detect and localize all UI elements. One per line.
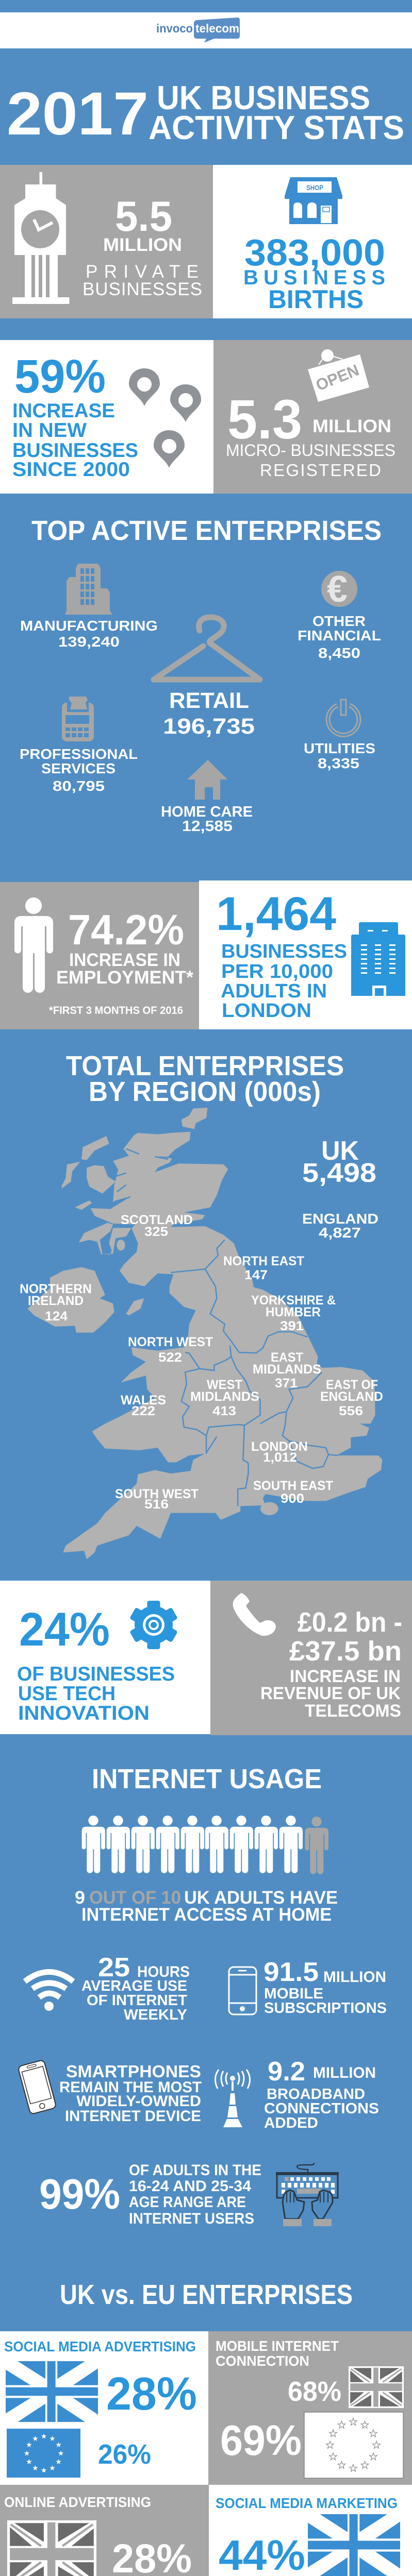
text: smartphones: SMARTPHONES: [66, 2062, 201, 2081]
heading: mobile internet connection: [216, 2338, 339, 2369]
icon: keyboard and hands: [276, 2163, 339, 2226]
label: yorkshire and humber: 391: [280, 1319, 304, 1333]
panel: tech innovation: [0, 1581, 210, 1734]
icon: shop: SHOP: [306, 183, 323, 192]
icon: power button: [328, 700, 359, 735]
stat: 59%: 59%: [14, 350, 106, 403]
label: other financial: [298, 613, 381, 661]
label: northern ireland: NORTHERN: [20, 1282, 92, 1296]
label: utilities: [304, 740, 375, 771]
text: businesses per 10,000 adults in london: [221, 941, 347, 1022]
text: micro-businesses registered: REGISTERED: [260, 461, 381, 480]
footnote: *FIRST 3 MONTHS OF 2016: [49, 1005, 183, 1016]
label: other financial: FINANCIAL: [298, 628, 381, 643]
text: businesses per 10,000 adults in london: PER 10,000: [221, 961, 333, 982]
label: east midlands: EAST: [271, 1350, 303, 1365]
icon: coat hanger: [154, 617, 260, 680]
stat: revenue range: [289, 1607, 402, 1667]
label: west midlands: WEST: [207, 1378, 242, 1392]
stat: 1,464: 1,464: [216, 888, 336, 940]
text: of businesses use tech innovation: [17, 1663, 175, 1724]
stat: 383,000 business births: BUSINESS: [243, 266, 385, 289]
text: smartphones: [59, 2062, 202, 2125]
label: yorkshire and humber: [251, 1293, 336, 1333]
panel: business births: [213, 165, 412, 318]
text: increase in revenue of uk telecoms: INCREASE IN: [290, 1667, 401, 1686]
text: businesses per 10,000 adults in london: LONDON: [222, 1000, 311, 1022]
label: north west: [128, 1335, 213, 1365]
text: increase in revenue of uk telecoms: REVENUE OF UK: [260, 1684, 401, 1703]
label: other financial: 8,450: [318, 645, 360, 661]
stat: uk 28%: 28%: [106, 2368, 197, 2420]
label: northern ireland: 124: [45, 1309, 68, 1324]
stat: 5.5 million private businesses: [83, 192, 202, 299]
stat: 25 hours: WEEKLY: [124, 2007, 187, 2023]
heading: online advertising: ONLINE ADVERTISING: [4, 2494, 151, 2510]
stat: 91.5 million mobile subscriptions: MILLION: [323, 1969, 386, 1986]
panel: social media advertising: [0, 2331, 208, 2485]
label: wales: WALES: [121, 1393, 166, 1408]
stat: 91.5 million mobile subscriptions: [263, 1957, 387, 2016]
label: east of england: 556: [339, 1404, 363, 1418]
label: east of england: ENGLAND: [320, 1389, 383, 1404]
text: increase in revenue of uk telecoms: TELECOMS: [305, 1701, 401, 1721]
stat: 383,000 business births: [243, 232, 385, 314]
panel: employment: [0, 882, 199, 1029]
text: of businesses use tech innovation: OF BUSINESSES: [17, 1663, 175, 1685]
text: adults age range: [129, 2162, 261, 2227]
label: scotland: 325: [144, 1225, 168, 1239]
stat: 5.5 million private businesses: 5.5: [115, 192, 172, 240]
heading: mobile internet connection: MOBILE INTERNET: [216, 2338, 339, 2354]
text: adults age range: AGE RANGE ARE: [129, 2194, 246, 2211]
heading: social media marketing: SOCIAL MEDIA MARKETING: [216, 2495, 398, 2511]
icon: mobile phone outline: [229, 1967, 256, 2014]
text: 9 out of 10 uk adults: 9: [75, 1888, 85, 1908]
stat: eu 69%: 69%: [220, 2416, 302, 2464]
icon: house: [187, 760, 227, 800]
text: 9 out of 10 uk adults: OUT OF 10: [89, 1888, 181, 1908]
label: east of england: EAST OF: [326, 1378, 378, 1392]
item: other financial: [298, 569, 381, 661]
stat: 9.2 million broadband: BROADBAND: [267, 2086, 365, 2103]
text: increase in new businesses: INCREASE: [12, 400, 115, 422]
text: increase in employment: [56, 950, 193, 988]
stat: 9.2 million broadband: ADDED: [264, 2115, 318, 2131]
label: home care: HOME CARE: [161, 804, 253, 820]
text: adults age range: OF ADULTS IN THE: [129, 2162, 261, 2179]
icon: uk flag: [7, 2520, 96, 2576]
text: businesses per 10,000 adults in london: ADULTS IN: [221, 980, 327, 1002]
text: smartphones: REMAIN THE MOST: [59, 2079, 202, 2096]
stat: 99%: 99%: [39, 2170, 120, 2218]
stat: 5.3 million: [227, 388, 391, 450]
heading: internet usage: INTERNET USAGE: [92, 1764, 322, 1794]
label: retail: [163, 688, 255, 739]
stat: 5.5 million private businesses: MILLION: [103, 235, 182, 255]
label: west midlands: MIDLANDS: [190, 1389, 259, 1404]
text: increase in employment: INCREASE IN: [69, 950, 180, 970]
stat: 9.2 million broadband: MILLION: [313, 2064, 376, 2081]
label: yorkshire and humber: HUMBER: [266, 1305, 321, 1319]
label: west midlands: [190, 1378, 259, 1418]
label: retail: 196,735: [163, 714, 255, 739]
text: of businesses use tech innovation: USE TECH: [18, 1683, 116, 1705]
label: south east: [253, 1479, 333, 1506]
icon: eu flag: [7, 2429, 80, 2478]
label: wales: [121, 1393, 166, 1418]
panel: mobile internet connection: [208, 2331, 412, 2485]
label: home care: [161, 804, 253, 835]
text: businesses per 10,000 adults in london: BUSINESSES: [221, 941, 347, 962]
label: yorkshire and humber: YORKSHIRE &: [251, 1293, 336, 1308]
item: manufacturing: [20, 564, 158, 650]
text: 9 out of 10 uk adults: UK ADULTS HAVE: [184, 1888, 338, 1908]
label: manufacturing: 139,240: [58, 634, 120, 650]
stat: 25 hours: OF INTERNET: [87, 1992, 187, 2009]
text: 9 out of 10 uk adults: [75, 1888, 338, 1925]
panel: online advertising: [0, 2485, 209, 2576]
map: united kingdom regions: [20, 1108, 383, 1560]
icon: euro coin: [321, 569, 357, 610]
label: south west: SOUTH WEST: [115, 1487, 199, 1501]
label: northern ireland: IRELAND: [28, 1294, 84, 1308]
stat: eu 26%: 26%: [98, 2439, 151, 2470]
stat: 74.2%: 74.2%: [68, 906, 184, 954]
text: increase in revenue of uk telecoms: [260, 1667, 401, 1721]
text: micro-businesses registered: [226, 441, 395, 480]
icon: office building: [65, 564, 112, 615]
label: south east: SOUTH EAST: [253, 1479, 333, 1493]
icon: uk flag: [6, 2361, 98, 2422]
stat: 5.5 million private businesses: BUSINESSES: [83, 279, 202, 299]
label: home care: 12,585: [182, 818, 233, 835]
label: northern ireland: [20, 1282, 92, 1324]
text: increase in new businesses: IN NEW: [12, 419, 87, 442]
text: of businesses use tech innovation: INNOVATION: [18, 1702, 150, 1724]
label: south west: 516: [144, 1497, 169, 1512]
stat: 25 hours: HOURS: [137, 1963, 190, 1980]
stat: uk 68%: 68%: [288, 2376, 341, 2407]
stat: 91.5 million mobile subscriptions: 91.5: [263, 1957, 319, 1987]
icon: tower block: [351, 922, 405, 996]
stat: 5.3 million: MILLION: [312, 416, 391, 436]
label: west midlands: 413: [212, 1404, 236, 1418]
stat: 25 hours: AVERAGE USE: [81, 1978, 187, 1994]
stat: revenue range: £37.5 bn: [289, 1636, 402, 1667]
label: wales: 222: [131, 1404, 155, 1418]
heading: uk vs eu enterprises: UK vs. EU ENTERPRISES: [60, 2279, 353, 2310]
heading: total enterprises by region: [66, 1050, 344, 1107]
label: east midlands: MIDLANDS: [253, 1362, 321, 1377]
stat: 383,000 business births: 383,000: [244, 232, 385, 274]
header logo: telecom: [195, 22, 239, 35]
label: east of england: [320, 1378, 383, 1418]
item: professional services: [20, 697, 138, 794]
label: north west: 522: [158, 1350, 182, 1365]
heading: top active enterprises: TOP ACTIVE ENTERPRISES: [31, 515, 382, 546]
label: north west: NORTH WEST: [128, 1335, 213, 1349]
stat: 9.2 million broadband: [264, 2057, 379, 2131]
label: london: [251, 1439, 308, 1465]
icon: location pins: [129, 368, 201, 468]
text: adults age range: INTERNET USERS: [129, 2210, 254, 2227]
heading: social media advertising: SOCIAL MEDIA ADVERTISING: [4, 2338, 196, 2354]
label: london: LONDON: [251, 1439, 308, 1454]
stat: 91.5 million mobile subscriptions: SUBSCRIPTIONS: [264, 2000, 387, 2016]
panel: micro-businesses: [213, 340, 412, 494]
label: professional services: SERVICES: [41, 760, 116, 776]
text: smartphones: WIDELY-OWNED: [76, 2093, 201, 2110]
label: north east: NORTH EAST: [223, 1254, 304, 1268]
stat: 9.2 million broadband: 9.2: [268, 2057, 305, 2087]
title: ACTIVITY STATS: [149, 109, 404, 146]
icon: euro coin: €: [327, 569, 348, 610]
icon: wifi: [25, 1972, 73, 2011]
label: east midlands: 371: [275, 1376, 298, 1391]
stat: revenue range: £0.2 bn -: [298, 1607, 402, 1638]
label: south east: 900: [281, 1492, 304, 1506]
label: england: [302, 1211, 378, 1241]
heading: total enterprises by region: BY REGION (000s): [89, 1076, 321, 1107]
text: smartphones: INTERNET DEVICE: [65, 2108, 201, 2125]
text: increase in new businesses: SINCE 2000: [12, 459, 130, 481]
icon: uk flag: [308, 2514, 400, 2576]
label: professional services: PROFESSIONAL: [20, 746, 138, 762]
label: retail: RETAIL: [169, 688, 249, 713]
label: england: 4,827: [319, 1225, 361, 1241]
item: retail: [154, 617, 260, 739]
icon: uk flag: [349, 2366, 404, 2408]
text: adults age range: 16-24 AND 25-34: [129, 2178, 251, 2195]
title: [7, 79, 404, 148]
icon: eu flag: [304, 2412, 403, 2478]
text: 9 out of 10 uk adults: INTERNET ACCESS AT HOME: [81, 1905, 332, 1925]
label: utilities: UTILITIES: [304, 740, 375, 756]
stat: 25 hours: [81, 1953, 190, 2023]
label: other financial: OTHER: [312, 613, 366, 629]
stat: 383,000 business births: BIRTHS: [268, 285, 364, 314]
icon: smartphone: [18, 2060, 57, 2114]
label: north east: [223, 1254, 304, 1282]
label: uk total: [302, 1136, 376, 1188]
label: england: ENGLAND: [302, 1211, 378, 1227]
label: scotland: [121, 1213, 193, 1239]
stat: 5.3 million: 5.3: [227, 388, 302, 450]
label: north east: 147: [244, 1268, 268, 1282]
stat: 91.5 million mobile subscriptions: MOBILE: [264, 1986, 323, 2002]
label: south west: [115, 1487, 199, 1512]
icon: big ben: [12, 172, 69, 304]
header logo: invoco: [156, 22, 193, 35]
stat: 5.5 million private businesses: PRIVATE: [86, 262, 199, 282]
icon: shop: [285, 177, 342, 224]
stat: 24%: 24%: [19, 1603, 110, 1656]
panel: 59% increase: [0, 340, 213, 494]
panel: private businesses: [0, 165, 213, 318]
label: professional services: [20, 746, 138, 794]
header logo: [0, 12, 412, 48]
icon: person: [14, 897, 53, 993]
text: micro-businesses registered: MICRO- BUSINESSES: [226, 441, 395, 460]
icon: telephone handset: [233, 1593, 276, 1636]
label: london: 1,012: [263, 1450, 297, 1465]
label: east midlands: [253, 1350, 321, 1391]
item: home care: [161, 760, 253, 835]
label: scotland: SCOTLAND: [121, 1213, 193, 1227]
heading: mobile internet connection: CONNECTION: [216, 2353, 309, 2369]
label: uk total: UK: [321, 1136, 359, 1166]
panel: telecoms revenue: [210, 1581, 412, 1735]
stat: 9.2 million broadband: CONNECTIONS: [264, 2100, 379, 2117]
item: utilities: [304, 700, 375, 771]
label: utilities: 8,335: [318, 755, 359, 771]
panel: london businesses: [199, 880, 412, 1029]
text: increase in new businesses: [12, 400, 138, 481]
icon: open sign: [308, 349, 369, 402]
title: 2017: [7, 80, 149, 148]
icon: open sign: OPEN: [314, 361, 361, 394]
heading: total enterprises by region: TOTAL ENTERPRISES: [66, 1050, 344, 1081]
label: professional services: 80,795: [53, 778, 105, 794]
icon: calculator: [62, 697, 94, 741]
label: uk total: 5,498: [302, 1158, 376, 1188]
icon: broadcast tower: [215, 2070, 250, 2127]
title: UK BUSINESS: [157, 79, 370, 116]
text: increase in new businesses: BUSINESSES: [12, 439, 138, 462]
stat: 25 hours: 25: [98, 1953, 130, 1982]
text: increase in employment: EMPLOYMENT*: [56, 968, 193, 988]
pictogram: nine of ten adults: [82, 1816, 328, 1874]
panel: social media marketing: [209, 2485, 412, 2576]
label: manufacturing: [20, 618, 158, 650]
label: manufacturing: MANUFACTURING: [20, 618, 158, 634]
icon: gear: [129, 1601, 178, 1649]
